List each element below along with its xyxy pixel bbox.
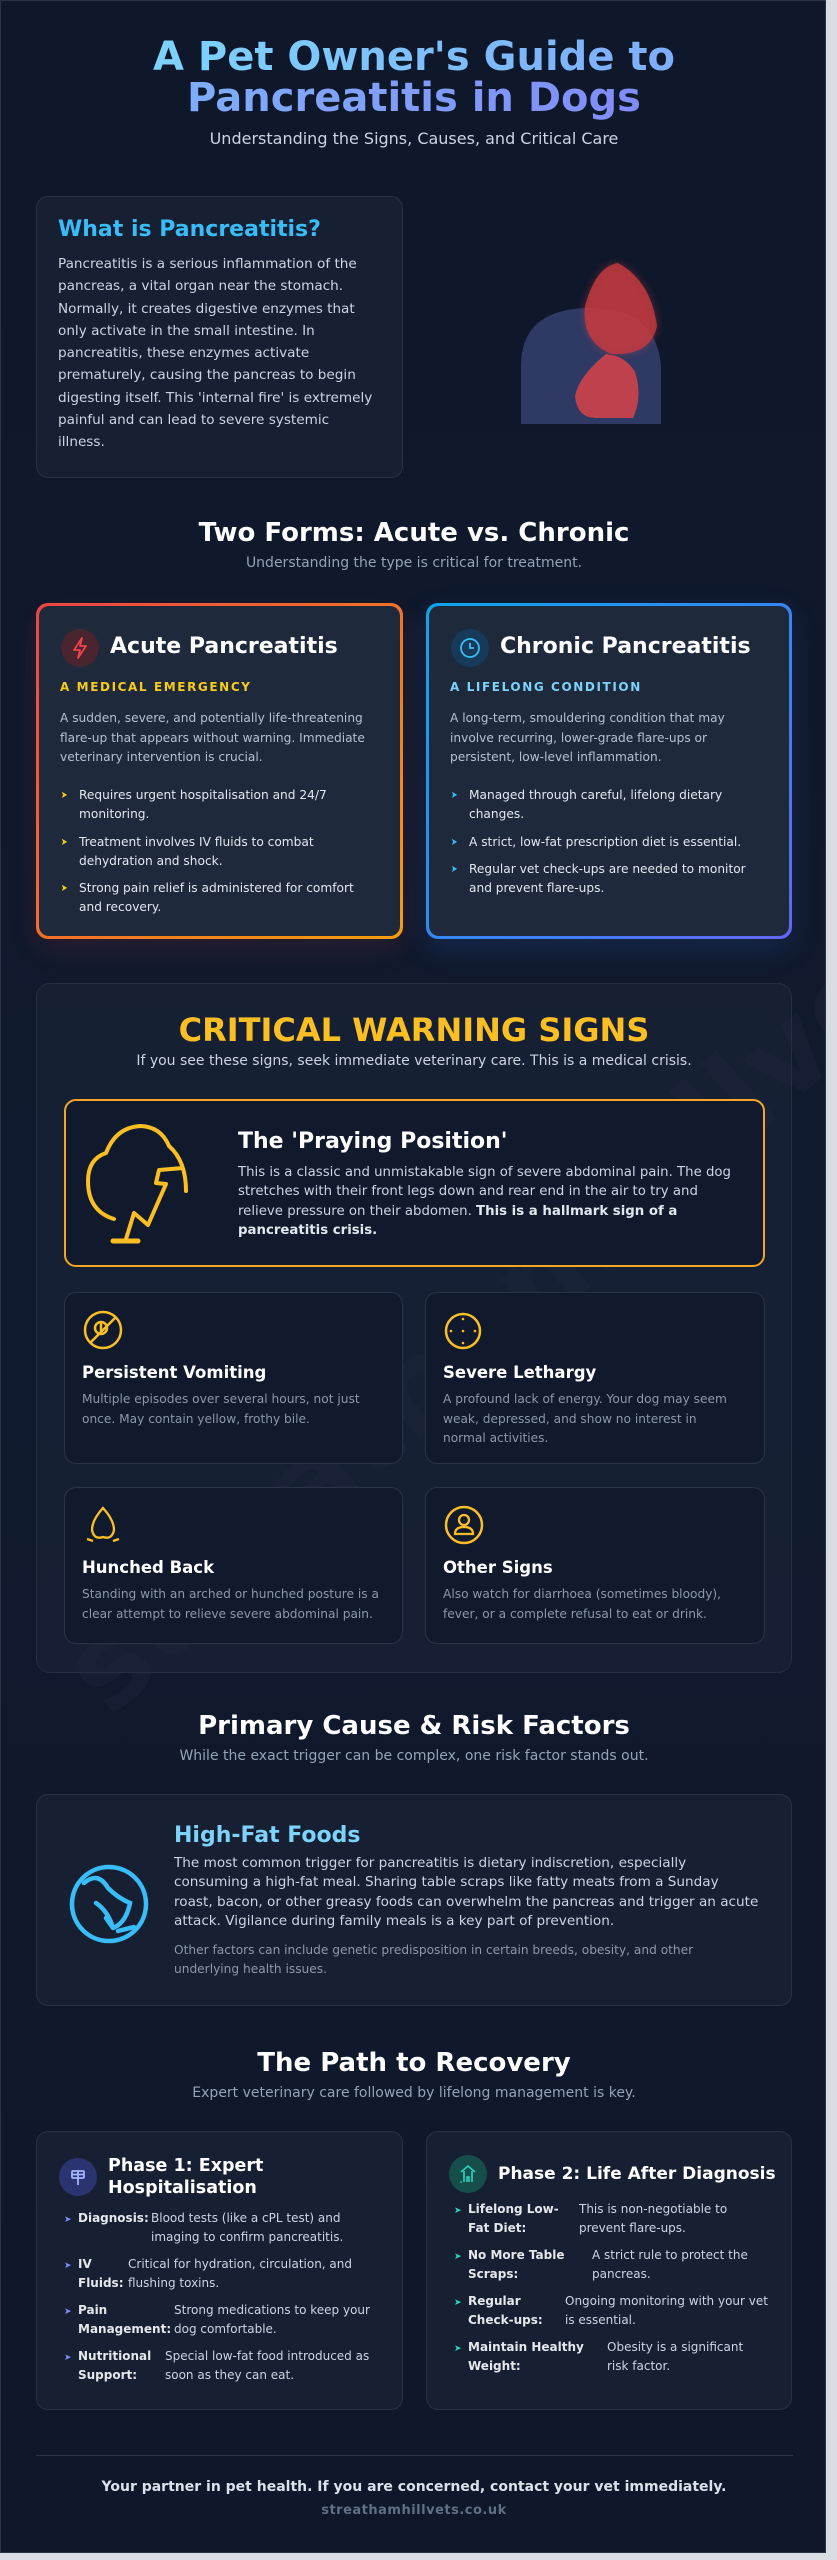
- illustration: inflamed pancreas: [521, 260, 661, 424]
- card: severe lethargy: [425, 1292, 765, 1464]
- subheading: recovery: Expert veterinary care followed by lifelong management is key.: [192, 2085, 636, 2101]
- heading: lethargy: Severe Lethargy: [443, 1363, 596, 1382]
- list: phase 2: Regular Check-ups:: [468, 2294, 543, 2327]
- icon: person: [444, 1506, 484, 1544]
- panel: high-fat foods: [36, 1794, 792, 2006]
- list: phase 1: Nutritional Support:: [78, 2349, 151, 2382]
- heading: critical warning signs: CRITICAL WARNING SIGNS: [179, 1011, 649, 1049]
- label: lifelong condition: A LIFELONG CONDITION: [450, 680, 642, 694]
- title: Pancreatitis in Dogs: [187, 75, 641, 121]
- icon: clock: [451, 629, 489, 667]
- subheading: critical: If you see these signs, seek immediate veterinary care. This is a medical crisis.: [136, 1053, 692, 1069]
- list: phase 2: Obesity is a significant risk factor.: [607, 2340, 743, 2373]
- list: chronic points: Managed through careful, lifelong dietary changes.: [469, 788, 722, 821]
- list: chronic points: Regular vet check-ups are needed to monitor and prevent flare-ups.: [469, 862, 746, 895]
- text: definition: Pancreatitis is a serious inflammation of the pancreas, a vital organ near the stomach. Normally, it creates digestive enzymes that only activate in the small intestine. In pancreatitis, these enzymes activate prematurely, causing the pancreas to begin digesting itself. This 'internal fire' is extremely painful and can lead to severe systemic illness.: [58, 256, 372, 450]
- text: acute description: A sudden, severe, and potentially life-threatening flare-up that appears without warning. Immediate veterinary intervention is crucial.: [60, 711, 365, 764]
- label: medical emergency: A MEDICAL EMERGENCY: [60, 680, 252, 694]
- list: phase 2: No More Table Scraps:: [468, 2248, 564, 2281]
- list: phase 2: [455, 2202, 768, 2373]
- card: persistent vomiting: [64, 1292, 403, 1464]
- heading: hunched: Hunched Back: [82, 1558, 214, 1577]
- icon: no food: [70, 1864, 148, 1944]
- heading: two forms: Two Forms: Acute vs. Chronic: [199, 518, 629, 548]
- panel: what is pancreatitis: [36, 196, 403, 478]
- icon: home: [449, 2155, 487, 2193]
- list: phase 2: A strict rule to protect the pancreas.: [592, 2248, 748, 2281]
- subtitle: Understanding the Signs, Causes, and Critical Care: [210, 129, 618, 148]
- card: other signs: [425, 1487, 765, 1644]
- subheading: two forms: Understanding the type is critical for treatment.: [246, 555, 582, 571]
- list: phase 2: Maintain Healthy Weight:: [468, 2340, 584, 2373]
- text: chronic description: A long-term, smouldering condition that may involve recurring, lower-grade flare-ups or persistent, low-level inflammation.: [450, 711, 725, 764]
- text: other signs: Also watch for diarrhoea (sometimes bloody), fever, or a complete refusal to eat or drink.: [443, 1587, 721, 1620]
- heading: vomiting: Persistent Vomiting: [82, 1363, 266, 1382]
- panel: acute: [36, 603, 403, 939]
- text: lethargy: A profound lack of energy. Your dog may seem weak, depressed, and show no interest in normal activities.: [443, 1392, 727, 1445]
- heading: phase 1: Phase 1: Expert: [108, 2156, 263, 2176]
- icon: lethargy: [444, 1312, 482, 1350]
- icon: hunched: [86, 1506, 120, 1542]
- heading: phase 2: Phase 2: Life After Diagnosis: [498, 2164, 776, 2184]
- list: acute points: Treatment involves IV fluids to combat dehydration and shock.: [79, 835, 314, 868]
- title: A Pet Owner's Guide to: [153, 34, 675, 80]
- text: other factors: Other factors can include genetic predisposition in certain breeds, obesity, and other underlying health issues.: [174, 1943, 693, 1976]
- list: phase 1: [65, 2211, 370, 2382]
- panel: critical warning signs: [36, 983, 792, 1673]
- list: acute points: Strong pain relief is administered for comfort and recovery.: [79, 881, 354, 914]
- card: hunched back: [64, 1487, 403, 1644]
- heading: other signs: Other Signs: [443, 1558, 553, 1577]
- list: acute points: Requires urgent hospitalisation and 24/7 monitoring.: [79, 788, 327, 821]
- heading: chronic: Chronic Pancreatitis: [500, 634, 751, 659]
- heading: acute: Acute Pancreatitis: [110, 634, 338, 659]
- title: [153, 34, 675, 121]
- list: phase 2: Ongoing monitoring with your vet is essential.: [565, 2294, 768, 2327]
- heading: recovery: The Path to Recovery: [257, 2048, 571, 2078]
- heading: phase 1: [108, 2156, 263, 2198]
- divider: [36, 2455, 793, 2456]
- list: chronic points: [452, 788, 746, 895]
- heading: what is: What is Pancreatitis?: [58, 217, 321, 242]
- heading: phase 1: Hospitalisation: [108, 2178, 257, 2198]
- panel: phase 1: [36, 2131, 403, 2410]
- list: acute points: [62, 788, 354, 914]
- icon: vomiting: [84, 1310, 122, 1350]
- list: phase 1: Critical for hydration, circulation, and flushing toxins.: [128, 2257, 352, 2290]
- icon: hospital: [59, 2158, 97, 2196]
- list: phase 1: Special low-fat food introduced as soon as they can eat.: [165, 2349, 369, 2382]
- list: phase 2: This is non-negotiable to prevent flare-ups.: [579, 2202, 727, 2235]
- text: high-fat body: The most common trigger for pancreatitis is dietary indiscretion, especially consuming a high-fat meal. Sharing table scraps like fatty meats from a Sunday roast, bacon, or other greasy foods can overwhelm the pancreas and trigger an acute attack. Vigilance during family meals is a key part of prevention.: [174, 1855, 758, 1929]
- list: phase 1: Blood tests (like a cPL test) and imaging to confirm pancreatitis.: [151, 2211, 343, 2244]
- icon: lightning: [61, 629, 99, 667]
- list: phase 1: IV Fluids:: [78, 2257, 124, 2290]
- text: vomiting: Multiple episodes over several hours, not just once. May contain yellow, frothy bile.: [82, 1392, 360, 1426]
- list: phase 1: Diagnosis:: [78, 2211, 149, 2225]
- footer text: Your partner in pet health. If you are concerned, contact your vet immediately.: [102, 2479, 726, 2495]
- callout: praying position: [64, 1099, 765, 1267]
- heading: primary cause: Primary Cause & Risk Factors: [198, 1711, 630, 1741]
- subheading: cause: While the exact trigger can be complex, one risk factor stands out.: [179, 1748, 649, 1764]
- icon: praying dog: [86, 1124, 188, 1244]
- list: phase 1: Pain Management:: [78, 2303, 171, 2336]
- list: chronic points: A strict, low-fat prescription diet is essential.: [469, 835, 741, 849]
- heading: praying position: The 'Praying Position': [238, 1129, 508, 1154]
- list: phase 1: Strong medications to keep your dog comfortable.: [174, 2303, 370, 2336]
- panel: chronic: [426, 603, 792, 939]
- heading: high-fat foods: High-Fat Foods: [174, 1823, 360, 1848]
- footer url: streathamhillvets.co.uk: [321, 2503, 507, 2518]
- list: phase 2: Lifelong Low-Fat Diet:: [468, 2202, 559, 2235]
- text: hunched: Standing with an arched or hunched posture is a clear attempt to relieve severe abdominal pain.: [82, 1587, 379, 1620]
- panel: phase 2: [426, 2131, 792, 2410]
- text: praying description: This is a classic and unmistakable sign of severe abdominal pain. The dog stretches with their front legs down and rear end in the air to try and relieve pressure on their abdomen. This is a hallmark sign of a pancreatitis crisis.: [238, 1165, 731, 1238]
